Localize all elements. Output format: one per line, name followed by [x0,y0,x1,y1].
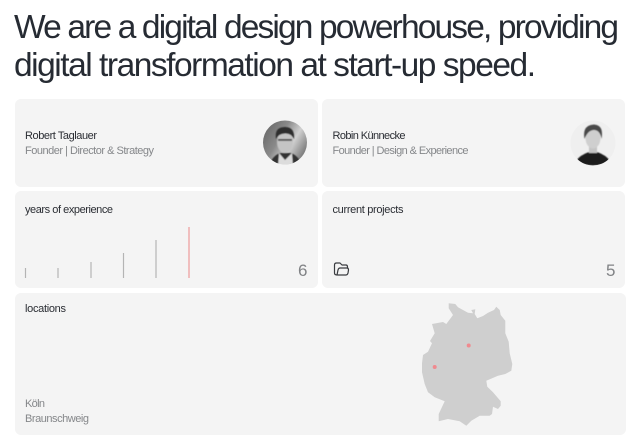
name: Robin Künnecke: Robin Künnecke [332,130,406,142]
label: current projects: current projects [332,204,404,216]
title [14,9,619,84]
panel: Robert Taglauer [15,99,318,187]
name: Robert Taglauer: Robert Taglauer [25,130,97,142]
marker: Köln [433,365,437,369]
marker: Braunschweig [467,344,471,348]
panel: locations [15,293,626,435]
icon: portrait of Robin [577,124,609,166]
icon: folder [334,263,348,275]
icon: portrait of Robert [263,120,307,166]
map: Germany [422,303,512,426]
list: cities: Köln [25,398,45,410]
label: locations: locations [25,303,66,315]
role: Director and Strategy: Founder | Director & Strategy [25,145,154,157]
panel: years of experience [15,191,318,288]
role: Design and Experience: Founder | Design & Experience [332,145,468,157]
number: 5: 5 [606,261,615,280]
panel: Robin Künnecke [322,99,625,187]
title: We are a digital design powerhouse, providing [14,9,619,46]
list: cities: Braunschweig [25,413,89,425]
title: digital transformation at start-up speed. [14,47,536,84]
number: 6: 6 [298,261,307,280]
list: cities [25,398,89,425]
bar chart [26,227,189,278]
panel: current projects [322,191,625,288]
label: years of experience: years of experience [25,204,113,216]
